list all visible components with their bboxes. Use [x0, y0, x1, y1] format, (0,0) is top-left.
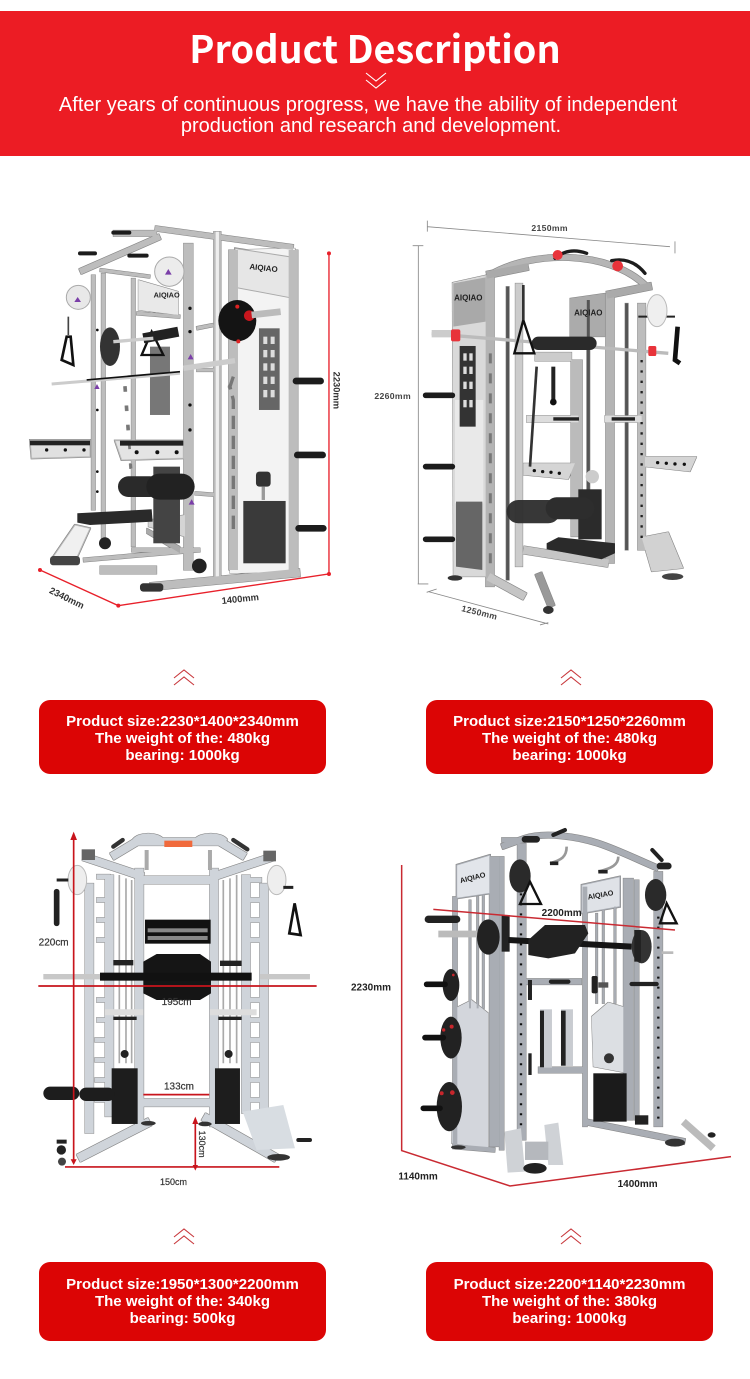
spec box: model 2: Product size:2150*1250*2260mm	[453, 713, 686, 730]
machine 1 weight stack and card: AIQIAO	[249, 262, 278, 274]
spec box: model 4: The weight of the: 380kg	[482, 1293, 657, 1310]
spec box: model 2: bearing: 1000kg	[512, 747, 627, 764]
icon: chevrons bottom right	[560, 1228, 582, 1244]
machine 3 dimensions: 220cm	[39, 938, 69, 949]
spec box: model 4	[426, 1262, 713, 1341]
icon: chevrons top right	[560, 669, 582, 686]
spec box: model 1: The weight of the: 480kg	[95, 730, 270, 747]
machine 3 dimensions	[38, 832, 317, 1187]
machine 3 dimensions: 130cm	[197, 1131, 207, 1158]
spec box: model 1: Product size:2230*1400*2340mm	[66, 713, 299, 730]
spec box: model 4: Product size:2200*1140*2230mm	[454, 1276, 685, 1293]
machine 1 dimensions: 1400mm	[221, 592, 259, 606]
spec box: model 3	[39, 1262, 326, 1341]
machine 4 dimensions: 2230mm	[351, 983, 391, 994]
machine 4 dimensions: 1140mm	[398, 1172, 438, 1183]
machine 1 weight stack and card: AIQIAO	[154, 290, 180, 299]
intro text	[58, 94, 677, 137]
machine 2 frame	[452, 257, 697, 607]
machine 4 dimensions	[351, 865, 731, 1190]
spec box: model 3: bearing: 500kg	[130, 1310, 235, 1327]
machine 1 frame	[30, 228, 300, 587]
machine 3 dimensions: 150cm	[160, 1177, 187, 1187]
spec box: model 3: Product size:1950*1300*2200mm	[66, 1276, 299, 1293]
machine 2 dimensions	[374, 221, 675, 625]
machine 4 frame: AIQIAO	[459, 870, 487, 885]
spec box: model 1	[39, 700, 326, 774]
machine 3 dimensions: 133cm	[164, 1081, 194, 1092]
machine 4 dimensions: 1400mm	[618, 1179, 658, 1190]
machine 2 details	[426, 250, 686, 614]
machine 2 dimensions: 2260mm	[374, 391, 411, 401]
machine 2 dimensions: 2150mm	[531, 223, 568, 233]
icon: header chevrons	[366, 72, 386, 89]
spec box: model 2: The weight of the: 480kg	[482, 730, 657, 747]
machine 4 frame	[423, 830, 716, 1174]
machine 1 dimensions	[38, 251, 341, 611]
machine 3 frame	[43, 837, 310, 1166]
spec box: model 1: bearing: 1000kg	[125, 747, 240, 764]
machine 1 dimensions: 2230mm	[331, 372, 341, 409]
machine 4 frame: AIQIAO	[587, 888, 614, 902]
icon: chevrons bottom left	[174, 1228, 194, 1244]
spec box: model 3: The weight of the: 340kg	[95, 1293, 270, 1310]
spec box: model 4: bearing: 1000kg	[512, 1310, 627, 1327]
intro text: After years of continuous progress, we have the ability of independent	[59, 94, 677, 116]
machine 2 illustration	[374, 221, 697, 625]
machine 2 details: AIQIAO	[454, 294, 483, 303]
machine 3 dimensions: 195cm	[162, 997, 192, 1008]
intro text: production and research and development.	[181, 115, 561, 137]
machine 1 weight stack and card	[30, 233, 323, 592]
machine 3 illustration	[38, 832, 317, 1187]
title: Product Description	[189, 19, 561, 74]
machine 2 dimensions: 1250mm	[461, 603, 498, 622]
machine 4 illustration	[351, 830, 731, 1190]
header banner	[0, 11, 750, 156]
icon: chevrons top left	[174, 669, 194, 686]
spec box: model 2	[426, 700, 713, 774]
machine 4 dimensions: 2200mm	[542, 908, 582, 919]
machine 1 dimensions: 2340mm	[48, 585, 86, 611]
machine 2 details: AIQIAO	[574, 309, 603, 318]
